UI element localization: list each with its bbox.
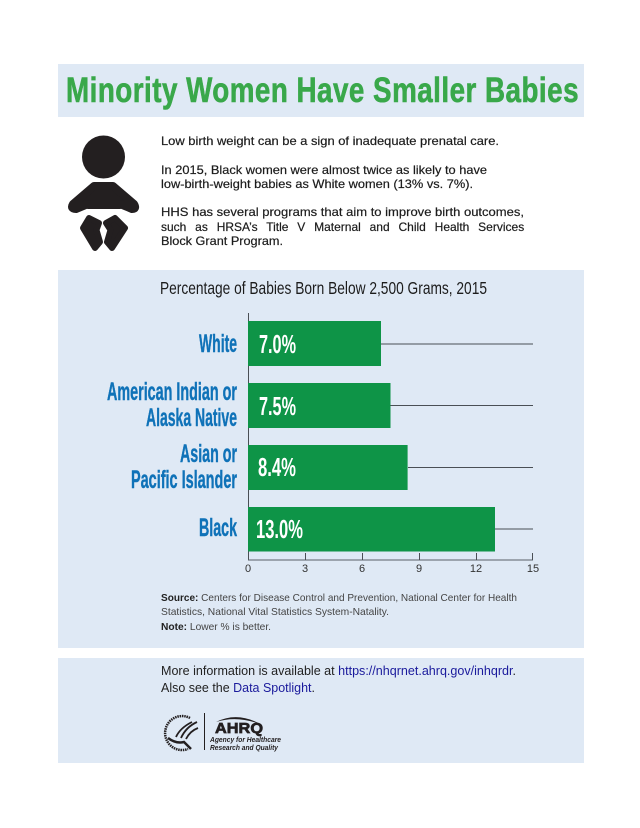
logo: AHRQ: Research and Quality bbox=[210, 745, 279, 752]
bar chart: 7.0% bbox=[259, 329, 296, 359]
source note: Source: Centers for Disease Control and Prevention, National Center for Health bbox=[161, 592, 517, 604]
bar chart: Black bbox=[199, 514, 237, 542]
icon: baby bbox=[72, 136, 135, 248]
logo: HHS seal bbox=[165, 716, 198, 750]
panel: more information bbox=[58, 658, 584, 763]
logo: AHRQ: AHRQ bbox=[215, 720, 263, 737]
bar chart: 12 bbox=[470, 563, 482, 575]
bar chart: 7.5% bbox=[259, 391, 296, 421]
bar chart: 3 bbox=[302, 563, 308, 575]
logo: AHRQ: Agency for Healthcare bbox=[209, 737, 281, 744]
bar chart: 15 bbox=[527, 563, 539, 575]
intro text: Low birth weight can be a sign of inadequate prenatal care. bbox=[161, 134, 499, 148]
bar chart: 13.0% bbox=[256, 514, 303, 544]
source note: Statistics, National Vital Statistics System-Natality. bbox=[161, 606, 389, 618]
intro text: HHS has several programs that aim to improve birth outcomes, bbox=[161, 205, 524, 219]
bar chart: Asian or bbox=[180, 440, 237, 468]
bar chart: 9 bbox=[416, 563, 422, 575]
source note: Note: Lower % is better. bbox=[161, 621, 271, 633]
bar chart: Pacific Islander bbox=[131, 466, 237, 494]
bar chart: American Indian or bbox=[107, 378, 237, 406]
bar chart: 6 bbox=[359, 563, 365, 575]
source note bbox=[161, 592, 517, 633]
intro text: low-birth-weight babies as White women (13% vs. 7%). bbox=[161, 177, 473, 191]
more information text: More information is available at https://nhqrnet.ahrq.gov/inhqrdr. bbox=[161, 664, 516, 678]
bar chart: White bbox=[199, 330, 237, 358]
bar chart: Alaska Native bbox=[146, 404, 237, 432]
intro text: such as HRSA’s Title V Maternal and Child Health Services bbox=[161, 220, 524, 234]
title banner bbox=[58, 64, 584, 117]
more information text: Also see the Data Spotlight. bbox=[161, 681, 315, 695]
intro text: Block Grant Program. bbox=[161, 234, 283, 248]
more information text bbox=[161, 664, 516, 695]
bar chart bbox=[107, 313, 539, 575]
logo: AHRQ bbox=[209, 717, 281, 752]
bar chart: 0 bbox=[245, 563, 251, 575]
panel: chart bbox=[58, 270, 584, 648]
intro text: In 2015, Black women were almost twice as likely to have bbox=[161, 163, 487, 177]
intro text bbox=[161, 134, 524, 248]
chart title: Percentage of Babies Born Below 2,500 Grams, 2015 bbox=[160, 278, 487, 298]
logo: divider bbox=[204, 713, 206, 750]
bar chart: 8.4% bbox=[258, 452, 296, 482]
